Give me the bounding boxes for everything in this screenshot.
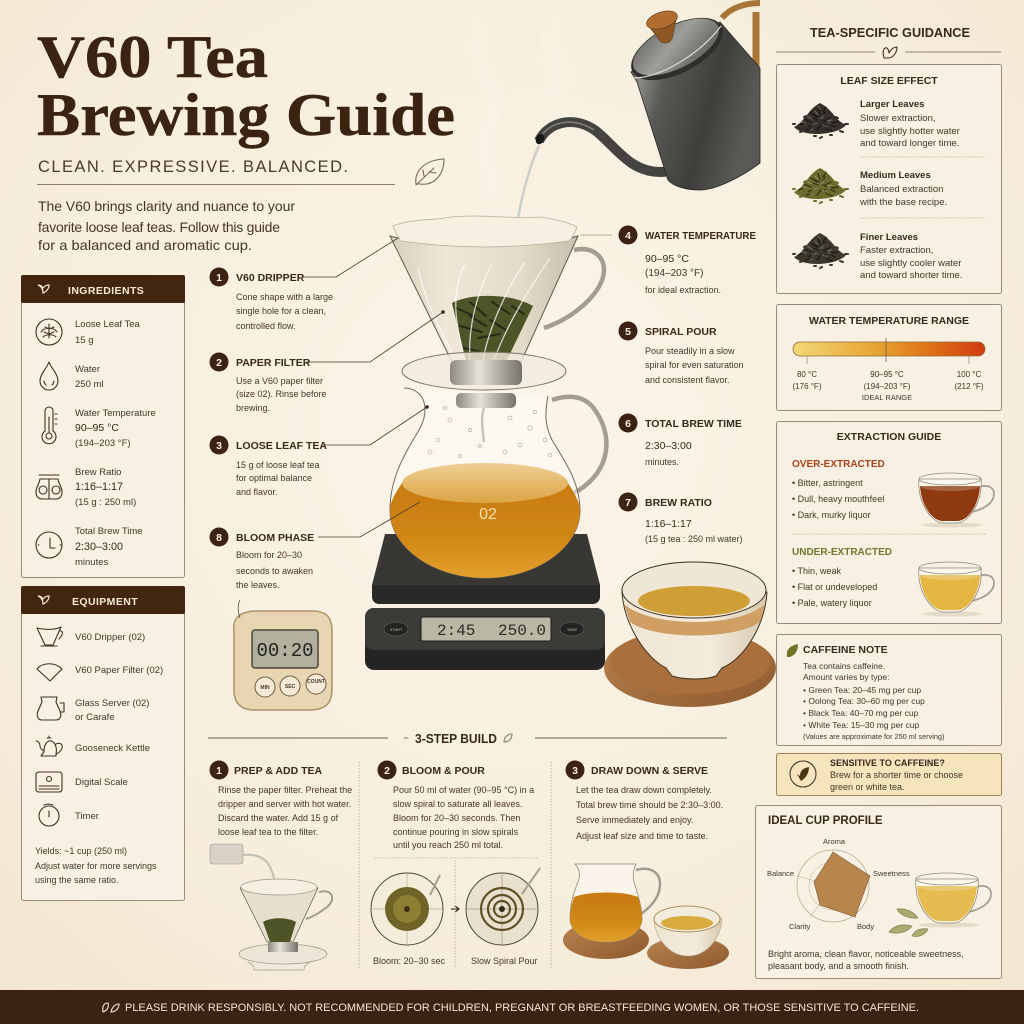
over-extracted list: • Dark, murky liquor xyxy=(792,510,871,520)
step 1 xyxy=(210,760,352,970)
diagram captions xyxy=(373,956,538,966)
panel: ideal cup profile xyxy=(756,806,1002,978)
panel: extraction guide xyxy=(776,422,1002,624)
title: Brewing Guide xyxy=(37,82,455,148)
callout 8: bloom phase xyxy=(210,502,420,590)
radar chart xyxy=(767,837,910,931)
step 1: 1 xyxy=(216,765,222,777)
brew ratio text: Brew Ratio xyxy=(75,467,121,478)
callout 6: total brew time: 6 xyxy=(625,418,631,430)
callout 1: V60 dripper: single hole for a clean, xyxy=(236,306,326,316)
step 3 illustration xyxy=(563,864,729,969)
temperature labels: (212 °F) xyxy=(955,382,984,391)
brew ratio text xyxy=(75,467,136,508)
timer digits: 00:20 xyxy=(256,640,314,662)
bloom diagram xyxy=(371,873,443,945)
larger leaves text: use slightly hotter water xyxy=(860,126,960,137)
callout 1: V60 dripper: Cone shape with a large xyxy=(236,292,333,302)
yields note: using the same ratio. xyxy=(35,875,119,885)
callout 2: paper filter: 2 xyxy=(216,357,222,369)
step 1 text: Discard the water. Add 15 g of xyxy=(218,813,339,823)
step dividers xyxy=(359,762,551,968)
caffeine text xyxy=(803,661,944,741)
holder disc xyxy=(402,352,566,408)
icon: paper filter xyxy=(37,664,62,681)
caffeine text: • Oolong Tea: 30–60 mg per cup xyxy=(803,696,925,706)
footer warning: PLEASE DRINK RESPONSIBLY. NOT RECOMMENDED FOR CHILDREN, PREGNANT OR BREASTFEEDING WOMEN, OR THOSE SENSITIVE TO CAFFEINE. xyxy=(125,1002,919,1014)
radar chart: Balance xyxy=(767,869,794,878)
dripper cone xyxy=(390,236,578,362)
callout 3: loose leaf tea: for optimal balance xyxy=(236,473,312,483)
caffeine heading: CAFFEINE NOTE xyxy=(803,644,888,656)
cup rim xyxy=(622,562,766,618)
callout 3: loose leaf tea: and flavor. xyxy=(236,487,278,497)
temperature labels: IDEAL RANGE xyxy=(862,393,912,402)
callout 6: total brew time: TOTAL BREW TIME xyxy=(645,418,742,430)
timer screen xyxy=(252,630,318,668)
arrow xyxy=(451,906,459,912)
callout 6: total brew time: 2:30–3:00 xyxy=(645,440,692,452)
water text: 250 ml xyxy=(75,379,104,390)
step 2 text: slow spiral to saturate all leaves. xyxy=(393,799,523,809)
filter label: V60 Paper Filter (02) xyxy=(75,665,163,676)
caffeine text: • Green Tea: 20–45 mg per cup xyxy=(803,685,921,695)
section heading: 3-step build: 3-STEP BUILD xyxy=(415,731,497,746)
step 2: 2 xyxy=(384,765,390,777)
caffeine text: • White Tea: 15–30 mg per cup xyxy=(803,720,919,730)
paper filter xyxy=(393,216,577,247)
tea surface xyxy=(402,463,568,503)
callout 8: bloom phase: Bloom for 20–30 xyxy=(236,550,302,560)
callout 1: V60 dripper xyxy=(210,238,398,331)
callout: sensitive to caffeine xyxy=(776,754,1002,796)
brew time text: minutes xyxy=(75,557,109,568)
check leaf icon xyxy=(790,761,816,787)
ingredients header: INGREDIENTS xyxy=(68,285,144,297)
step 3: 3 xyxy=(572,765,578,777)
water temperature text: 90–95 °C xyxy=(75,422,119,434)
icon: thermometer xyxy=(42,407,57,444)
over-extracted list: • Dull, heavy mouthfeel xyxy=(792,494,884,504)
kettle handle xyxy=(722,3,760,18)
intro text xyxy=(38,198,295,253)
section heading: tea-specific guidance xyxy=(776,26,1001,58)
profile description: pleasant body, and a smooth finish. xyxy=(768,961,909,971)
scale display: 2:45 xyxy=(437,622,475,640)
title: V60 Tea xyxy=(37,24,268,90)
callout 6: total brew time: minutes. xyxy=(645,457,679,467)
larger leaves pile xyxy=(793,103,848,138)
scale display: 250.0 xyxy=(498,622,546,640)
loose leaf tea text xyxy=(75,319,141,346)
callout 5: spiral pour: 5 xyxy=(625,326,631,338)
ingredients header xyxy=(21,275,185,303)
step 3 text: Let the tea draw down completely. xyxy=(576,785,712,795)
ideal cup illustration xyxy=(916,873,991,928)
sensitive text: SENSITIVE TO CAFFEINE? xyxy=(830,758,945,768)
leaves xyxy=(889,909,928,937)
brewed leaves xyxy=(452,296,533,362)
icon: loose leaf tea xyxy=(36,319,62,345)
step 3 xyxy=(563,760,729,969)
step 2 text: Pour 50 ml of water (90–95 °C) in a xyxy=(393,785,534,795)
callout 2: paper filter: PAPER FILTER xyxy=(236,357,311,369)
under-extracted list: • Thin, weak xyxy=(792,566,842,576)
intro text: for a balanced and aromatic cup. xyxy=(38,237,252,253)
callout 4: water temperature: 90–95 °C xyxy=(645,253,689,265)
under-extracted list: UNDER-EXTRACTED xyxy=(792,547,892,558)
temperature heading: WATER TEMPERATURE RANGE xyxy=(809,315,969,327)
callout 7: brew ratio: 7 xyxy=(625,497,631,509)
equipment header: EQUIPMENT xyxy=(72,596,138,608)
water temperature text: Water Temperature xyxy=(75,408,156,419)
water text xyxy=(75,364,104,390)
subtitle: CLEAN. EXPRESSIVE. BALANCED. xyxy=(38,158,348,176)
radar chart: Clarity xyxy=(789,922,811,931)
brew ratio text: (15 g : 250 ml) xyxy=(75,497,136,508)
dripper label: V60 Dripper (02) xyxy=(75,632,145,643)
brewed tea xyxy=(390,483,580,578)
caffeine text: Amount varies by type: xyxy=(803,672,889,682)
intro text: The V60 brings clarity and nuance to your xyxy=(38,198,295,214)
cup body xyxy=(622,592,767,679)
under-extracted list: • Flat or undeveloped xyxy=(792,582,877,592)
icon: brew ratio scale xyxy=(36,475,62,499)
panel: ingredients xyxy=(21,275,185,578)
step 2: BLOOM & POUR xyxy=(402,765,485,777)
medium leaves text: with the base recipe. xyxy=(859,197,947,208)
yields note xyxy=(35,846,157,885)
cup tea xyxy=(638,586,750,616)
timer buttons: MIN xyxy=(260,685,270,691)
spiral pour diagram xyxy=(466,868,540,945)
glass server illustration xyxy=(390,388,606,578)
sensitive text xyxy=(830,758,963,792)
finer leaves text: Finer Leaves xyxy=(860,232,918,243)
scale buttons: TARE xyxy=(567,627,578,632)
sensitive text: green or white tea. xyxy=(830,782,905,792)
water stream xyxy=(513,146,539,252)
extraction heading: EXTRACTION GUIDE xyxy=(837,431,941,443)
callout 1: V60 dripper: 1 xyxy=(216,272,222,284)
caffeine leaf icon xyxy=(787,644,798,657)
step 1 text: dripper and server with hot water. xyxy=(218,799,351,809)
step 3 text: Adjust leaf size and time to taste. xyxy=(576,831,708,841)
callout 8: bloom phase: the leaves. xyxy=(236,580,280,590)
callout 8: bloom phase: seconds to awaken xyxy=(236,566,313,576)
step 1: PREP & ADD TEA xyxy=(234,765,323,777)
icon: timer xyxy=(39,804,59,826)
finer leaves text: use slightly cooler water xyxy=(860,258,961,269)
finer leaves text: and toward shorter time. xyxy=(860,270,962,281)
step 2 xyxy=(371,760,540,966)
over-extracted cup xyxy=(919,473,994,528)
section heading: tea-specific guidance: TEA-SPECIFIC GUIDANCE xyxy=(810,26,970,40)
scale display xyxy=(421,617,551,641)
over-extracted list: • Bitter, astringent xyxy=(792,478,863,488)
step 2 text: Bloom for 20–30 seconds. Then xyxy=(393,813,520,823)
icon: water drop xyxy=(40,362,58,390)
kettle knob xyxy=(644,7,680,43)
scale label: Digital Scale xyxy=(75,777,128,788)
water text: Water xyxy=(75,364,100,375)
diagram captions: Slow Spiral Pour xyxy=(471,956,538,966)
under-extracted list: • Pale, watery liquor xyxy=(792,598,872,608)
ideal cup heading: IDEAL CUP PROFILE xyxy=(768,815,883,827)
wooden saucer xyxy=(604,629,776,707)
scale buttons: START xyxy=(390,627,403,632)
medium leaves pile xyxy=(793,168,848,203)
profile description: Bright aroma, clean flavor, noticeable sweetness, xyxy=(768,949,964,959)
radar chart: Sweetness xyxy=(873,869,910,878)
server label: or Carafe xyxy=(75,712,115,723)
panel: water temperature range xyxy=(776,304,1002,410)
callout 2: paper filter: Use a V60 paper filter xyxy=(236,376,323,386)
water temperature text xyxy=(75,408,156,449)
step 1 text: loose leaf tea to the filter. xyxy=(218,827,318,837)
radar chart: Body xyxy=(857,922,874,931)
callout 5: spiral pour: SPIRAL POUR xyxy=(645,326,717,338)
callout 3: loose leaf tea: LOOSE LEAF TEA xyxy=(236,440,327,452)
dripper handle xyxy=(544,249,604,328)
callout 3: loose leaf tea: 3 xyxy=(216,440,222,452)
temperature labels xyxy=(793,370,984,402)
icon: clock xyxy=(36,532,62,558)
step 1 text: Rinse the paper filter. Preheat the xyxy=(218,785,352,795)
temperature labels: (194–203 °F) xyxy=(864,382,911,391)
server handle xyxy=(552,397,606,494)
intro text: favorite loose leaf teas. Follow this guide xyxy=(38,219,280,235)
icon: gooseneck kettle xyxy=(36,736,62,756)
steam xyxy=(474,10,560,195)
callout 7: brew ratio xyxy=(618,492,743,544)
larger leaves text: and toward longer time. xyxy=(860,138,959,149)
brew ratio text: 1:16–1:17 xyxy=(75,481,123,493)
timer wire xyxy=(238,600,240,618)
timer body xyxy=(234,611,332,710)
callout 5: spiral pour xyxy=(618,322,744,385)
callout 4: water temperature: 4 xyxy=(625,230,631,242)
brew time text: 2:30–3:00 xyxy=(75,541,123,553)
medium leaves text: Medium Leaves xyxy=(860,170,931,181)
caffeine text: • Black Tea: 40–70 mg per cup xyxy=(803,708,919,718)
step 2 text: continue pouring in slow spirals xyxy=(393,827,519,837)
callout 1: V60 dripper: controlled flow. xyxy=(236,321,296,331)
kettle label: Gooseneck Kettle xyxy=(75,743,150,754)
equipment header xyxy=(21,586,185,614)
step 3 text xyxy=(576,785,723,841)
callout 7: brew ratio: 1:16–1:17 xyxy=(645,518,692,530)
loose leaf tea text: Loose Leaf Tea xyxy=(75,319,141,330)
scale buttons xyxy=(384,622,584,636)
under-extracted list xyxy=(792,547,892,608)
medium leaves text xyxy=(859,170,947,208)
callout 8: bloom phase: 8 xyxy=(216,532,222,544)
callout 6: total brew time xyxy=(618,414,742,467)
panel: caffeine note xyxy=(776,634,1002,746)
callout 1: V60 dripper: V60 DRIPPER xyxy=(236,272,305,284)
finer leaves text xyxy=(860,232,962,281)
callout 2: paper filter: brewing. xyxy=(236,403,270,413)
finer leaves pile xyxy=(793,233,848,268)
condensation droplets xyxy=(428,406,552,458)
callout 7: brew ratio: (15 g tea : 250 ml water) xyxy=(645,534,743,544)
larger leaves text: Larger Leaves xyxy=(860,99,924,110)
digital scale xyxy=(365,534,605,670)
step 2 text xyxy=(393,785,534,850)
callout 4: water temperature: WATER TEMPERATURE xyxy=(645,230,756,242)
callout 5: spiral pour: and consistent flavor. xyxy=(645,375,730,385)
over-extracted list: OVER-EXTRACTED xyxy=(792,459,885,470)
step 3 text: Total brew time should be 2:30–3:00. xyxy=(576,800,723,810)
timer label: Timer xyxy=(75,811,99,822)
icon: glass server xyxy=(37,697,64,720)
larger leaves text xyxy=(860,99,960,149)
medium leaves text: Balanced extraction xyxy=(860,184,943,195)
yields note: Yields: ~1 cup (250 ml) xyxy=(35,846,127,856)
panel: equipment xyxy=(21,586,185,900)
scale top plate xyxy=(372,534,600,604)
callout 5: spiral pour: Pour steadily in a slow xyxy=(645,346,735,356)
server label xyxy=(75,698,149,723)
water temperature text: (194–203 °F) xyxy=(75,438,131,449)
callout 2: paper filter xyxy=(210,310,445,413)
title xyxy=(37,24,455,148)
icon: digital scale xyxy=(36,772,62,792)
dripper ribs xyxy=(418,258,550,360)
teacup on saucer xyxy=(604,562,776,707)
larger leaves text: Slower extraction, xyxy=(860,113,936,124)
icon: leaf by subtitle xyxy=(416,159,444,185)
timer buttons xyxy=(255,674,326,697)
radar chart: Aroma xyxy=(823,837,846,846)
profile description xyxy=(768,949,964,971)
brew time text xyxy=(75,526,143,568)
finer leaves text: Faster extraction, xyxy=(860,245,933,256)
drip xyxy=(482,408,484,442)
yields note: Adjust water for more servings xyxy=(35,861,157,871)
step 2 text: until you reach 250 ml total. xyxy=(393,840,503,850)
footer warning xyxy=(0,990,1024,1024)
scale base xyxy=(365,608,605,670)
cup band xyxy=(624,604,765,636)
timer buttons: SEC xyxy=(285,684,296,690)
timer xyxy=(234,600,332,710)
caffeine text: Tea contains caffeine. xyxy=(803,661,885,671)
step 3 text: Serve immediately and enjoy. xyxy=(576,815,693,825)
step 1 illustration xyxy=(210,844,332,970)
callout 7: brew ratio: BREW RATIO xyxy=(645,497,712,509)
under-extracted cup xyxy=(919,562,994,616)
temperature bar xyxy=(793,338,985,364)
sensitive text: Brew for a shorter time or choose xyxy=(830,770,963,780)
step 3: DRAW DOWN & SERVE xyxy=(591,765,708,777)
loose leaf tea text: 15 g xyxy=(75,335,94,346)
brew time text: Total Brew Time xyxy=(75,526,143,537)
kettle illustration xyxy=(534,3,760,190)
kettle spout xyxy=(539,122,677,172)
timer buttons: COUNT xyxy=(307,679,325,685)
callout 2: paper filter: (size 02). Rinse before xyxy=(236,389,327,399)
callout 3: loose leaf tea: 15 g of loose leaf tea xyxy=(236,460,320,470)
callout 4: water temperature: (194–203 °F) xyxy=(645,268,703,279)
server body xyxy=(390,388,580,578)
dripper illustration xyxy=(390,216,604,408)
callout 4: water temperature xyxy=(580,226,756,295)
diagram captions: Bloom: 20–30 sec xyxy=(373,956,446,966)
temperature labels: 100 °C xyxy=(957,370,981,379)
server label: Glass Server (02) xyxy=(75,698,149,709)
callout 3: loose leaf tea xyxy=(210,405,429,497)
temperature labels: 80 °C xyxy=(797,370,817,379)
server marking: 02 xyxy=(479,506,497,523)
callout 5: spiral pour: spiral for even saturation xyxy=(645,360,744,370)
callout 8: bloom phase: BLOOM PHASE xyxy=(236,532,314,544)
leaf size heading: LEAF SIZE EFFECT xyxy=(840,75,938,87)
caffeine text: (Values are approximate for 250 ml serving) xyxy=(803,732,944,741)
temperature labels: (176 °F) xyxy=(793,382,822,391)
kettle lid xyxy=(622,5,732,93)
step 1 text xyxy=(218,785,352,837)
temperature labels: 90–95 °C xyxy=(870,370,904,379)
panel: leaf size effect xyxy=(776,64,1002,294)
callout 4: water temperature: for ideal extraction. xyxy=(645,285,721,295)
icon: dripper xyxy=(37,627,62,646)
section heading: 3-step build xyxy=(208,731,727,746)
over-extracted list xyxy=(792,459,885,520)
kettle body xyxy=(631,22,760,190)
